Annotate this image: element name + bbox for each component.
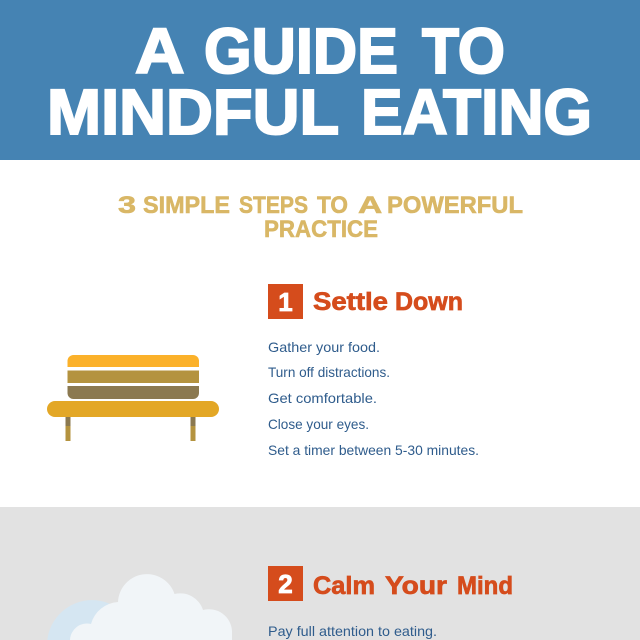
step 1 text (268, 339, 479, 458)
step 1 title: Settle (313, 288, 388, 316)
icon: cloud (47, 574, 232, 640)
subtitle: POWERFUL (387, 192, 523, 219)
subtitle: STEPS (239, 192, 308, 219)
title: GUIDE (204, 15, 398, 87)
step 2 number badge: 2 (278, 569, 293, 599)
subtitle: SIMPLE (143, 192, 230, 219)
step 2 heading (268, 566, 513, 601)
icon: bench (47, 355, 219, 441)
step 1 heading (268, 284, 463, 319)
step 1 text: Get comfortable. (268, 390, 377, 406)
title: MINDFUL (47, 76, 338, 148)
subtitle: PRACTICE (264, 216, 378, 243)
title: A (135, 15, 183, 87)
title: EATING (361, 76, 592, 148)
step 2 text: Pay full attention to eating. (268, 623, 437, 639)
header banner (0, 0, 640, 160)
step 2 number badge (268, 566, 303, 601)
step 1 text: Set a timer between 5-30 minutes. (268, 442, 479, 458)
subtitle (118, 192, 523, 243)
subtitle: A (358, 192, 382, 219)
subtitle: TO (317, 192, 348, 219)
step 2 title: Your (385, 572, 447, 600)
step 1 text: Close your eyes. (268, 416, 369, 432)
step 1 number badge (268, 284, 303, 319)
step 1 text: Turn off distractions. (268, 364, 390, 380)
title (47, 15, 592, 148)
title: TO (422, 15, 505, 87)
step 1 text: Gather your food. (268, 339, 380, 355)
subtitle: 3 (118, 192, 136, 219)
step 1 number badge: 1 (278, 287, 293, 317)
panel: step 2 (0, 507, 640, 640)
step 2 title: Mind (457, 572, 513, 600)
step 2 title: Calm (313, 572, 375, 600)
step 1 title: Down (395, 288, 463, 316)
